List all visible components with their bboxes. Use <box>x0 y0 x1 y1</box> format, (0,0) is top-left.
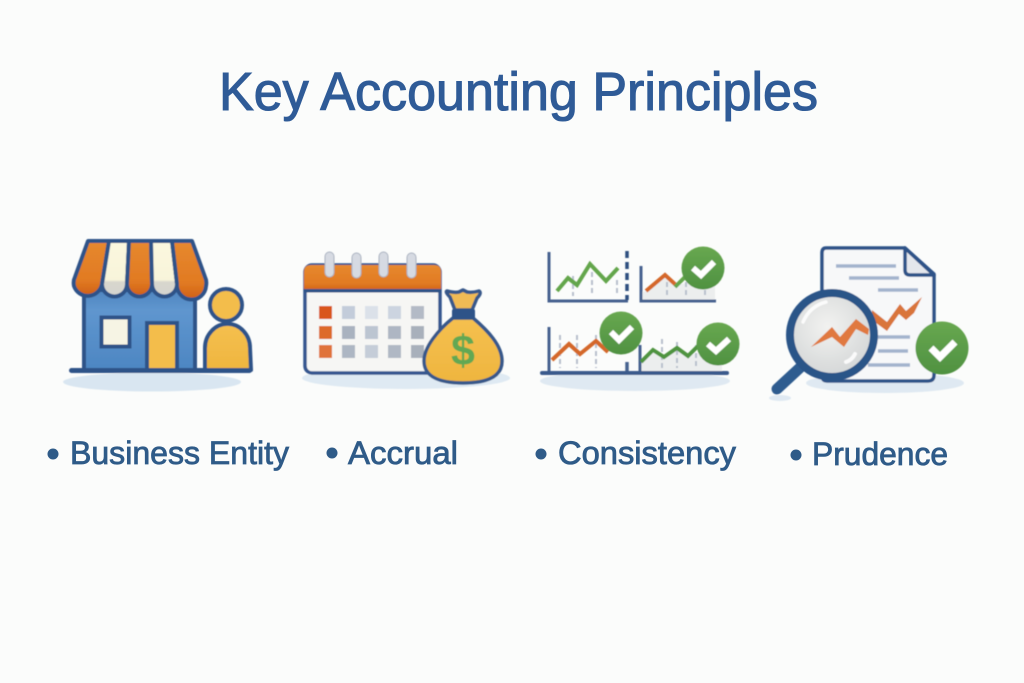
shop wall <box>84 290 195 370</box>
shop door <box>147 323 177 370</box>
document lines <box>836 266 918 365</box>
magnifier lens <box>790 293 874 377</box>
title: Key Accounting Principles <box>219 62 818 122</box>
label: Consistency: Consistency <box>558 435 736 471</box>
icon: calendar with money bag <box>302 252 510 389</box>
check badges <box>600 246 740 366</box>
document page <box>822 248 934 381</box>
label: Prudence: Prudence <box>812 436 948 472</box>
money bag <box>424 290 502 383</box>
lens highlights <box>803 302 826 322</box>
calendar header <box>304 265 441 291</box>
ground shadow <box>806 373 964 393</box>
document trend line <box>872 297 922 331</box>
calendar rings <box>325 252 416 278</box>
calendar day grid <box>319 306 424 358</box>
chart: bottom left <box>549 327 627 372</box>
ground shadow <box>540 371 730 391</box>
ground shadow <box>302 367 510 389</box>
icon: document with magnifier and check <box>769 248 968 401</box>
document fold <box>905 248 934 275</box>
chart: top left <box>549 251 628 301</box>
base line <box>69 368 252 373</box>
check badge <box>916 322 968 374</box>
ground shadow <box>63 372 241 392</box>
shop window <box>102 318 130 346</box>
magnifier handle <box>777 364 804 389</box>
dollar sign: $ <box>451 327 475 375</box>
person body <box>205 324 251 370</box>
chart: bottom right <box>640 339 722 372</box>
label: Accrual: Accrual <box>348 435 458 471</box>
label: Business Entity: Business Entity <box>70 435 289 471</box>
chart: top right <box>641 266 716 301</box>
icon: four consistent charts <box>540 246 740 391</box>
calendar page <box>305 265 440 373</box>
icon: storefront with owner <box>63 241 252 392</box>
person head <box>210 289 242 321</box>
lens trend line <box>811 319 869 347</box>
chart baseline <box>540 371 729 375</box>
awning <box>74 241 206 300</box>
